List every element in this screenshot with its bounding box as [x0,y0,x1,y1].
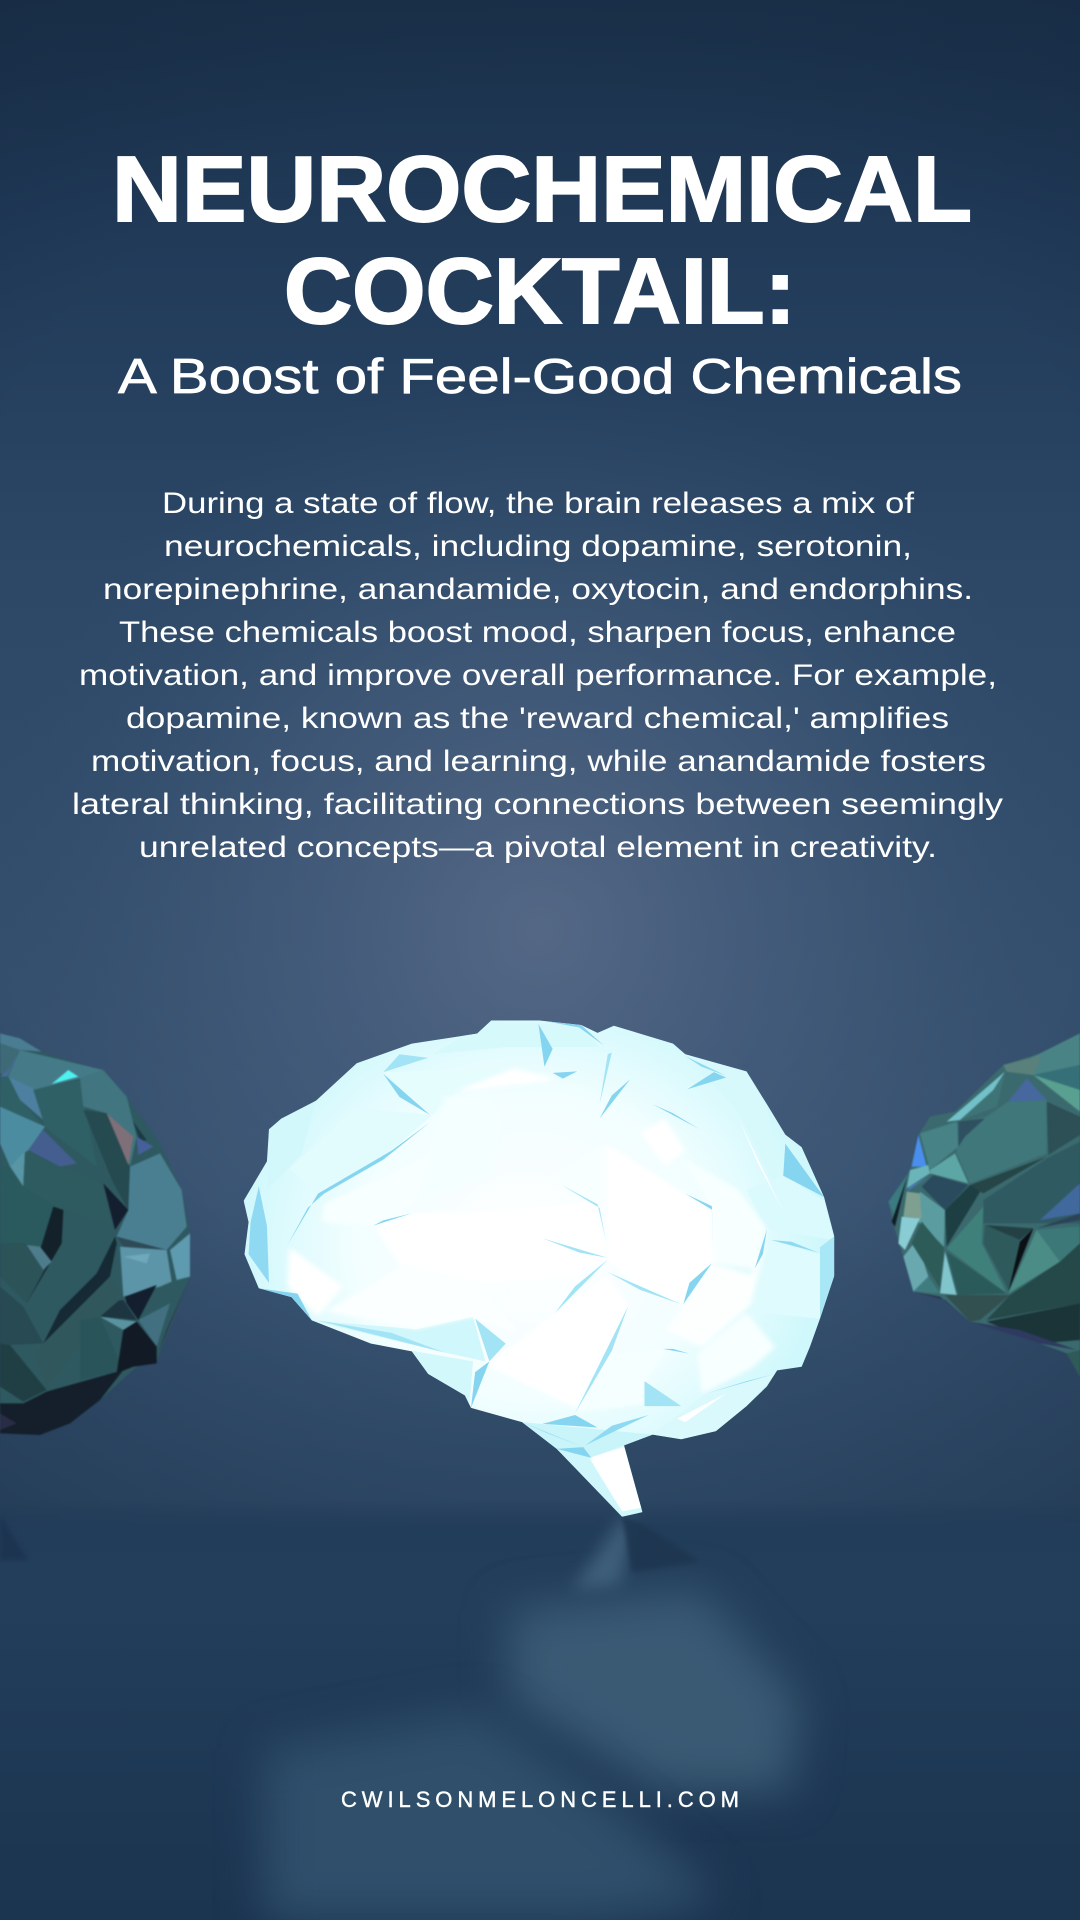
title [112,137,972,343]
icon: glowing central low-poly brain [244,1020,834,1517]
body paragraph: dopamine, known as the 'reward chemical,' amplifies [126,702,949,735]
body paragraph: These chemicals boost mood, sharpen focus, enhance [119,616,956,649]
body paragraph: lateral thinking, facilitating connections between seemingly [72,788,1003,821]
title: COCKTAIL: [284,239,796,343]
body paragraph: motivation, focus, and learning, while anandamide fosters [91,745,986,778]
body paragraph: norepinephrine, anandamide, oxytocin, and endorphins. [103,573,973,606]
body paragraph: During a state of flow, the brain releases a mix of [162,487,915,520]
icon: right low-poly brain [888,1033,1080,1377]
body paragraph: motivation, and improve overall performance. For example, [79,659,997,692]
icon: left low-poly brain [0,1033,190,1435]
subtitle: A Boost of Feel-Good Chemicals [118,350,962,404]
footer website: CWILSONMELONCELLI.COM [341,1787,739,1812]
body paragraph: unrelated concepts—a pivotal element in creativity. [139,831,937,864]
reflective floor with brain reflection [0,1500,1080,1920]
body paragraph: neurochemicals, including dopamine, serotonin, [164,530,912,563]
title: NEUROCHEMICAL [112,137,972,241]
body paragraph [72,487,1003,864]
